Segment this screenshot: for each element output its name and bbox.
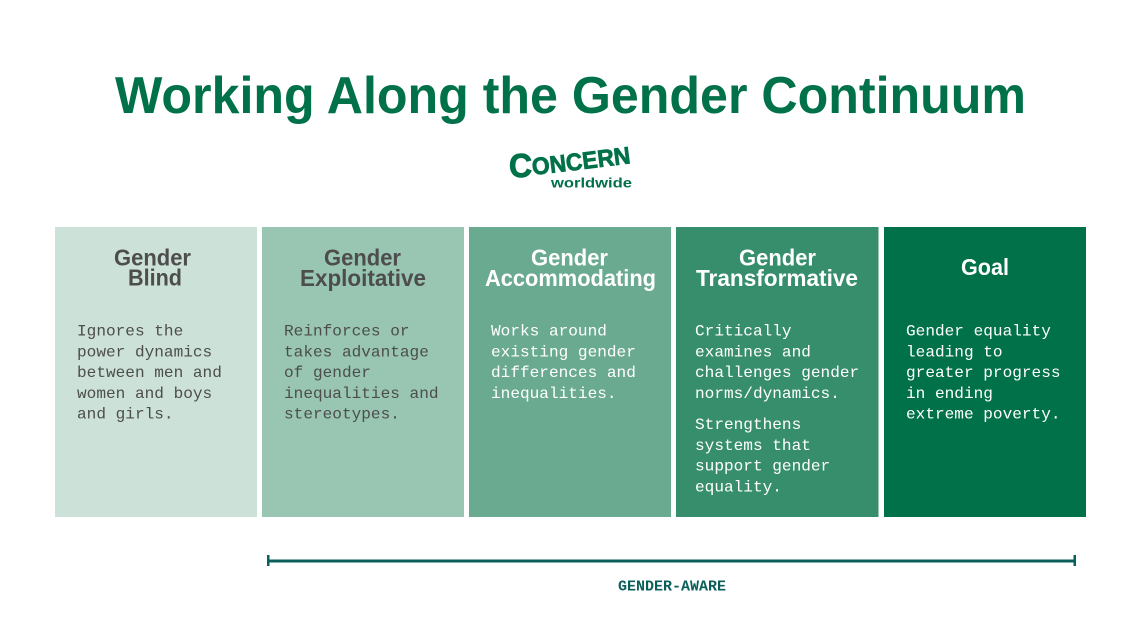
text: Gender Blind description: Ignores the <box>77 322 183 340</box>
panel: Gender Blind <box>55 227 257 517</box>
heading: Gender Blind: Gender <box>114 244 191 270</box>
text: Gender Transformative description <box>695 322 859 496</box>
logo: Concern Worldwide: C <box>509 147 532 184</box>
heading: Gender Exploitative <box>300 244 426 291</box>
heading: Goal: Goal <box>961 254 1009 280</box>
text: Gender Exploitative description: Reinforces or <box>284 322 410 340</box>
text: Gender Accommodating description <box>491 322 636 403</box>
text: Goal description: Gender equality <box>906 322 1051 340</box>
logo: Concern Worldwide: worldwide <box>550 174 632 190</box>
text: Goal description: greater progress <box>906 364 1061 382</box>
text: Gender Blind description: between men and <box>77 364 222 382</box>
panel: Gender Accommodating <box>469 227 671 517</box>
heading: Gender Blind: Blind <box>128 264 182 290</box>
heading: Gender Exploitative: Gender <box>324 244 401 270</box>
bracket: gender-aware span <box>267 555 1076 566</box>
text: Gender Transformative description: examines and <box>695 343 811 361</box>
text: Gender Transformative description: Critically <box>695 322 792 340</box>
text: Gender Accommodating description: Works around <box>491 322 607 340</box>
text: Goal description: in ending <box>906 385 993 403</box>
text: Gender Accommodating description: inequalities. <box>491 385 617 403</box>
text: Gender Accommodating description: existing gender <box>491 343 636 361</box>
text: Gender Exploitative description: of gender <box>284 364 371 382</box>
heading: Gender Blind <box>114 244 191 290</box>
text: Gender Blind description: women and boys <box>77 385 212 403</box>
logo: Concern Worldwide: ONCERN <box>532 146 630 175</box>
label: GENDER-AWARE: GENDER-AWARE <box>618 578 726 596</box>
text: Gender Transformative description: systems that <box>695 437 811 455</box>
heading: Gender Exploitative: Exploitative <box>300 265 426 291</box>
text: Goal description: leading to <box>906 343 1003 361</box>
text: Gender Transformative description: Strengthens <box>695 416 801 434</box>
panel: Gender Transformative <box>676 227 878 517</box>
panel: Goal <box>884 227 1086 517</box>
heading: Gender Transformative: Transformative <box>696 265 858 291</box>
text: Gender Blind description <box>77 322 222 424</box>
heading: Gender Accommodating: Accommodating <box>485 265 656 291</box>
heading: Gender Accommodating: Gender <box>531 244 608 270</box>
text: Gender Transformative description: challenges gender <box>695 364 859 382</box>
text: Gender Exploitative description <box>284 322 439 424</box>
panel: Gender Exploitative <box>262 227 464 517</box>
text: Gender Exploitative description: stereotypes. <box>284 406 400 424</box>
text: Gender Blind description: power dynamics <box>77 343 212 361</box>
title: Working Along the Gender Continuum <box>115 67 1026 125</box>
logo: Concern Worldwide <box>509 146 632 190</box>
text: Gender Transformative description: norms/dynamics. <box>695 385 840 403</box>
text: Gender Blind description: and girls. <box>77 406 174 424</box>
text: Gender Exploitative description: takes advantage <box>284 343 429 361</box>
text: Goal description <box>906 322 1061 424</box>
text: Gender Exploitative description: inequalities and <box>284 385 439 403</box>
text: Goal description: extreme poverty. <box>906 406 1061 424</box>
text: Gender Transformative description: support gender <box>695 458 830 476</box>
text: Gender Accommodating description: differences and <box>491 364 636 382</box>
heading: Gender Accommodating <box>485 244 656 291</box>
heading: Gender Transformative: Gender <box>739 244 816 270</box>
heading: Gender Transformative <box>696 244 858 291</box>
text: Gender Transformative description: equality. <box>695 478 782 496</box>
